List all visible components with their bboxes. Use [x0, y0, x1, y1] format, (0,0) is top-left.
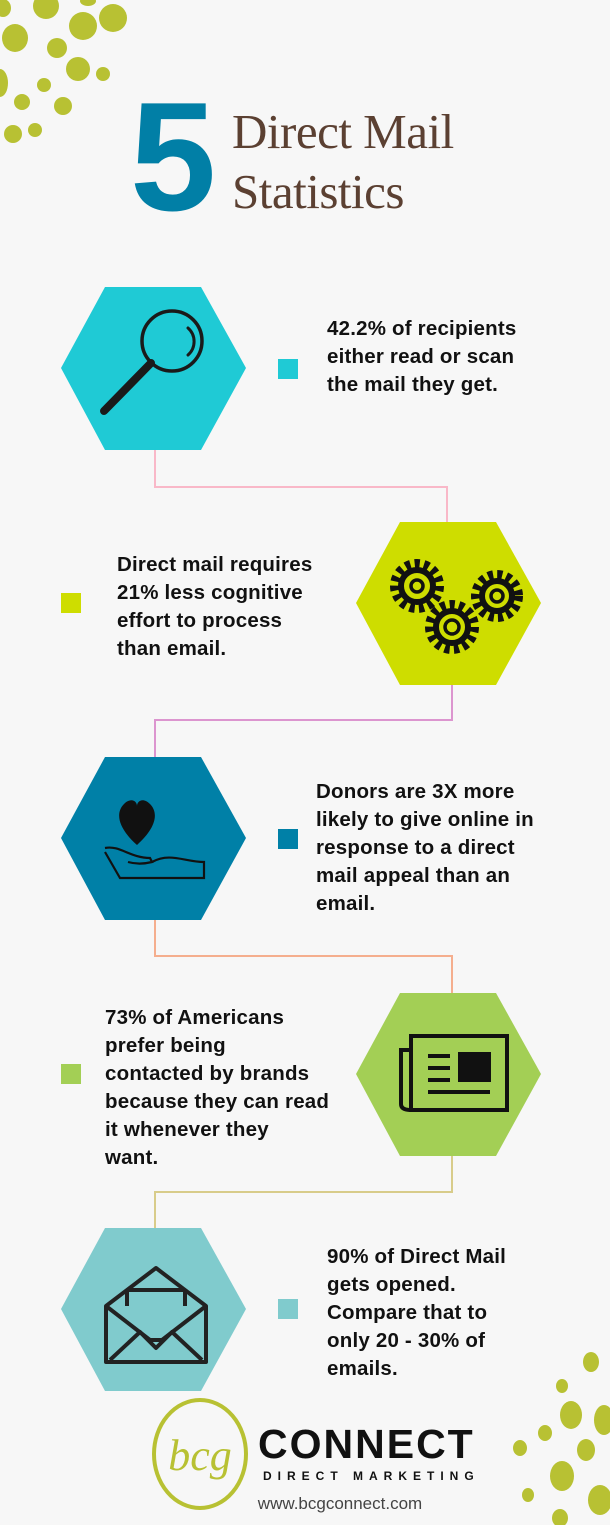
text: either read or scan [327, 345, 514, 368]
connector 3 [155, 920, 452, 993]
text: mail appeal than an [316, 864, 510, 887]
icon: envelope [106, 1268, 206, 1362]
text: prefer being [105, 1034, 226, 1057]
text: Compare that to [327, 1301, 487, 1324]
text: email. [316, 892, 375, 915]
text: 73% of Americans [105, 1006, 284, 1029]
text: because they can read [105, 1090, 329, 1113]
connector 1 [155, 450, 447, 522]
hexagon 1: magnifier [61, 287, 246, 450]
hexagon 4: newspaper [356, 993, 541, 1156]
logo text: DIRECT MARKETING [263, 1469, 480, 1483]
text: the mail they get. [327, 373, 498, 396]
stat 1 [278, 359, 298, 379]
stat 2 [61, 593, 81, 613]
text: 21% less cognitive [117, 581, 303, 604]
text: Donors are 3X more [316, 780, 514, 803]
text: response to a direct [316, 836, 515, 859]
text: likely to give online in [316, 808, 534, 831]
hexagon 2: gears [356, 522, 541, 685]
hexagon 5: envelope [61, 1228, 246, 1391]
title: Statistics [232, 164, 404, 219]
text: it whenever they [105, 1118, 269, 1141]
title: Direct Mail [232, 104, 454, 159]
connector 4 [155, 1156, 452, 1228]
text: than email. [117, 637, 226, 660]
icon: gears [395, 564, 518, 649]
logo circle [154, 1400, 246, 1508]
text: want. [105, 1146, 158, 1169]
decorative dots top-left [0, 0, 127, 143]
logo text: CONNECT [258, 1421, 475, 1467]
text: 42.2% of recipients [327, 317, 517, 340]
title: 5 [130, 70, 212, 243]
text: Direct mail requires [117, 553, 312, 576]
icon: magnifying glass [104, 311, 202, 411]
hexagon 3: heart in hand [61, 757, 246, 920]
logo circle: bcg [168, 1431, 232, 1480]
text: only 20 - 30% of [327, 1329, 485, 1352]
text: gets opened. [327, 1273, 456, 1296]
title [130, 70, 454, 243]
text: effort to process [117, 609, 282, 632]
connector 2 [155, 685, 452, 757]
icon: newspaper [401, 1036, 507, 1110]
text: 90% of Direct Mail [327, 1245, 506, 1268]
decorative dots bottom-right [513, 1352, 610, 1525]
stat 5 [278, 1299, 298, 1319]
stat 3 [278, 829, 298, 849]
text: contacted by brands [105, 1062, 309, 1085]
icon: heart and hand [119, 800, 155, 845]
text: emails. [327, 1357, 398, 1380]
website: www.bcgconnect.com [258, 1494, 422, 1513]
stat 4 [61, 1064, 81, 1084]
